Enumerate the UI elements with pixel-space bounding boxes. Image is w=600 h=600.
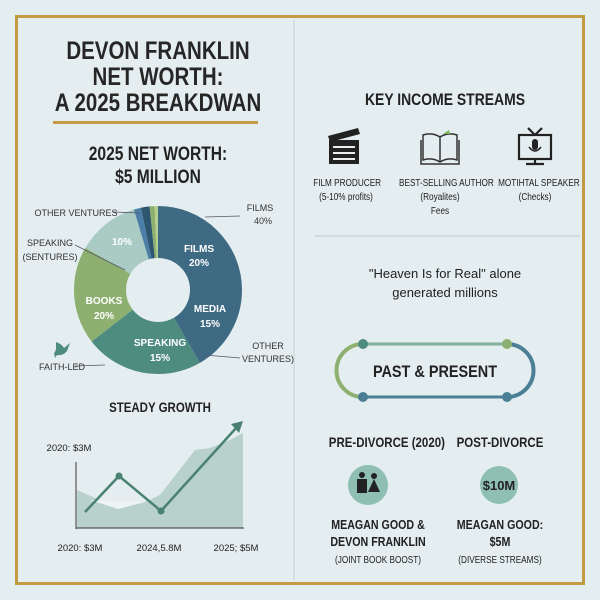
donut chart: FILMS	[184, 244, 214, 255]
icon: $10M	[480, 466, 518, 504]
label: film producer: FILM PRODUCER	[313, 178, 381, 189]
growth chart: 2024,5.8M	[137, 543, 182, 554]
text: $5M	[490, 534, 510, 549]
donut chart: OTHER	[252, 341, 284, 351]
net worth heading: 2025 NET WORTH:	[89, 144, 227, 165]
title: A 2025 BREAKDWAN	[55, 89, 261, 117]
key income heading: KEY INCOME STREAMS	[365, 90, 525, 109]
icon: clapperboard	[328, 128, 360, 164]
label: film producer	[313, 178, 381, 203]
donut chart: OTHER VENTURES	[34, 208, 118, 218]
label: author: BEST-SELLING AUTHOR	[399, 178, 494, 189]
icon: couple	[348, 465, 388, 505]
label: speaker: MOTIHTAL SPEAKER	[498, 178, 580, 189]
net worth heading	[89, 144, 227, 188]
title: NET WORTH:	[93, 63, 223, 91]
pre-divorce: PRE-DIVORCE (2020)	[329, 434, 445, 450]
text: DEVON FRANKLIN	[330, 534, 426, 549]
label: author	[399, 178, 494, 217]
donut chart: 20%	[94, 311, 114, 322]
label: film producer: (5-10% profits)	[319, 192, 373, 203]
text: $10M	[483, 478, 515, 493]
donut chart: FAITH-LED	[39, 362, 85, 372]
title	[55, 37, 261, 117]
quote	[369, 266, 521, 300]
growth chart: 2020: $3M	[58, 543, 103, 554]
donut chart: FILMS	[247, 203, 273, 213]
donut chart: 40%	[254, 216, 272, 226]
title: DEVON FRANKLIN	[66, 37, 250, 65]
donut chart: 20%	[189, 258, 209, 269]
donut chart: (SENTURES)	[22, 252, 78, 262]
text: (DIVERSE STREAMS)	[458, 555, 542, 566]
post-divorce: POST-DIVORCE	[457, 434, 543, 450]
icon: dove	[54, 342, 70, 358]
label: speaker	[498, 178, 580, 203]
donut chart: SPEAKING	[134, 338, 186, 349]
growth chart: 2025; $5M	[214, 543, 259, 554]
net worth heading: $5 MILLION	[115, 167, 201, 188]
donut chart: SPEAKING	[27, 238, 73, 248]
label: author: Fees	[431, 206, 449, 217]
icon: tv mic	[519, 128, 551, 164]
text: MEAGAN GOOD &	[331, 517, 425, 532]
label: speaker: (Checks)	[519, 192, 551, 203]
donut chart: MEDIA	[194, 304, 226, 315]
donut chart: BOOKS	[86, 296, 123, 307]
past & present pill: PAST & PRESENT	[373, 363, 497, 381]
donut chart: 15%	[200, 319, 220, 330]
text: (JOINT BOOK BOOST)	[335, 555, 421, 566]
donut chart: VENTURES)	[242, 354, 294, 364]
text: MEAGAN GOOD:	[457, 517, 543, 532]
growth heading: STEADY GROWTH	[109, 399, 211, 415]
donut chart: 15%	[150, 353, 170, 364]
growth chart: 2020: $3M	[47, 443, 92, 454]
icon: book	[421, 134, 459, 164]
quote: generated millions	[392, 285, 498, 300]
quote: "Heaven Is for Real" alone	[369, 266, 521, 281]
donut chart: 10%	[112, 237, 132, 248]
label: author: (Royalites)	[420, 192, 460, 203]
